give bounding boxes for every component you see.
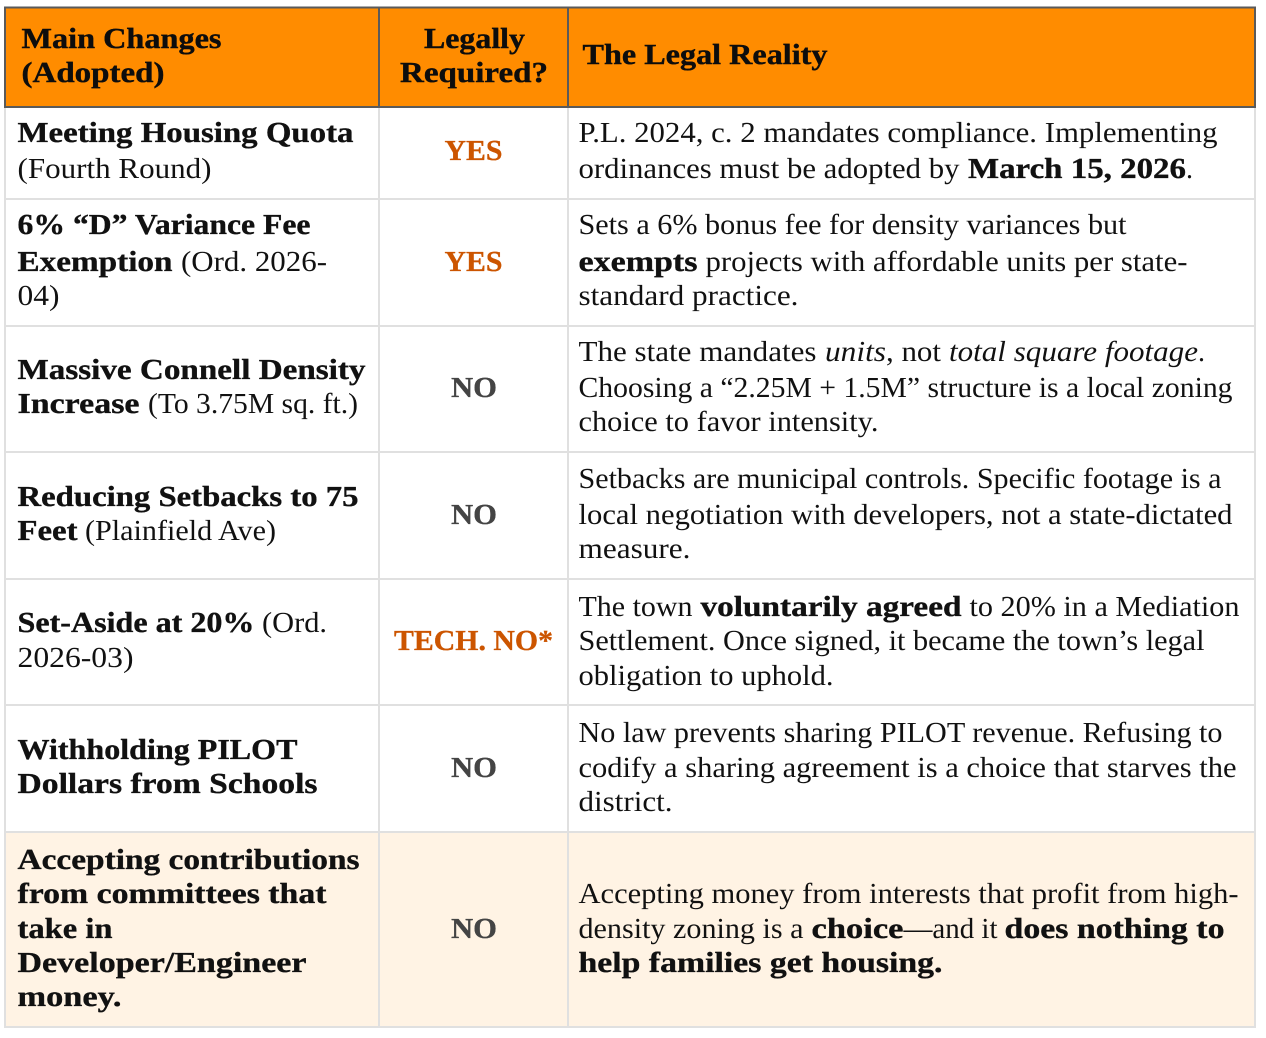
reality: setbacks: local negotiation with developers, not a state-dictated (578, 499, 1233, 531)
change: reducing setbacks (18, 481, 358, 547)
change: set-aside (18, 607, 327, 674)
row: connell density (18, 336, 1232, 438)
reality: connell density (578, 336, 1232, 438)
reality: contributions: —and it (903, 913, 998, 945)
change: accepting contributions: Developer/Engineer (18, 947, 307, 979)
reality: contributions: density zoning is a (578, 913, 804, 945)
change: set-aside: (Ord. (262, 607, 327, 639)
change: withholding pilot: Withholding PILOT (18, 734, 298, 766)
row: variance fee exemption (18, 209, 1188, 312)
reality: housing quota: . (1186, 153, 1193, 185)
reality: contributions: choice (812, 913, 904, 945)
reality: pilot: district. (578, 786, 672, 818)
status: no: NO (451, 752, 497, 784)
change: accepting contributions (18, 844, 360, 1013)
row: withholding pilot (18, 717, 1236, 818)
reality: variance fee: standard practice. (578, 280, 798, 312)
reality: housing quota: P.L. 2024, c. 2 mandates compliance. Implementing (578, 117, 1218, 149)
reality: housing quota: March 15, 2026 (968, 153, 1186, 185)
reality: pilot (578, 717, 1236, 818)
change: variance fee exemption (18, 209, 327, 312)
change: meeting housing quota (18, 117, 354, 185)
reality: set-aside: The town (578, 591, 693, 623)
reality: connell density: . (1198, 336, 1205, 368)
change: reducing setbacks: Feet (18, 515, 78, 547)
heading: legally required: Legally (424, 23, 526, 55)
change: variance fee exemption: (Ord. 2026- (181, 246, 327, 278)
reality: connell density: Choosing a “2.25M + 1.5M” structure is a local zoning (578, 372, 1232, 404)
change: variance fee exemption: Exemption (18, 246, 172, 278)
reality: setbacks (578, 463, 1233, 565)
status: yes: YES (444, 135, 502, 167)
change: set-aside: Set-Aside at 20% (18, 607, 254, 639)
heading: main changes: Main Changes (22, 23, 221, 55)
reality: contributions (578, 878, 1238, 979)
change: reducing setbacks: (Plainfield Ave) (85, 515, 276, 547)
reality: contributions: Accepting money from interests that profit from high- (578, 878, 1238, 910)
status: yes: YES (444, 246, 502, 278)
heading: main changes: (Adopted) (22, 57, 164, 89)
reality: connell density: The state mandates (578, 336, 816, 368)
change: connell density: Increase (18, 388, 140, 420)
reality: set-aside: obligation to uphold. (578, 660, 834, 692)
change: meeting housing quota: Meeting Housing Quota (18, 117, 354, 149)
reality: variance fee: exempts (578, 246, 698, 278)
row: meeting housing quota (5, 107, 1255, 199)
reality: set-aside (578, 591, 1240, 692)
reality: variance fee: Sets a 6% bonus fee for density variances but (578, 209, 1126, 241)
heading: legally required (400, 23, 548, 89)
change: variance fee exemption: 6% “D” Variance Fee (18, 209, 311, 241)
reality: set-aside: voluntarily agreed (700, 591, 962, 623)
reality: set-aside: Settlement. Once signed, it became the town’s legal (578, 625, 1204, 657)
change: withholding pilot: Dollars from Schools (18, 768, 318, 800)
status: no: NO (451, 499, 497, 531)
heading: main changes (22, 23, 221, 89)
reality: setbacks: Setbacks are municipal controls. Specific footage is a (578, 463, 1222, 495)
change: connell density: (To 3.75M sq. ft.) (148, 388, 358, 420)
change: accepting contributions: take in (18, 913, 112, 945)
status: technically no: TECH. NO* (394, 625, 553, 657)
reality: connell density: total square footage (949, 336, 1198, 368)
row: set-aside (18, 591, 1240, 692)
change: meeting housing quota: (Fourth Round) (18, 153, 212, 185)
reality: housing quota: ordinances must be adopted by (578, 153, 960, 185)
change: set-aside: 2026-03) (18, 642, 134, 674)
status: no: NO (451, 372, 497, 404)
reality: connell density: units (825, 336, 886, 368)
row: reducing setbacks (18, 463, 1233, 565)
reality: variance fee: projects with affordable units per state- (706, 246, 1188, 278)
change: reducing setbacks: Reducing Setbacks to 75 (18, 481, 358, 513)
change: connell density (18, 354, 366, 420)
reality: pilot: No law prevents sharing PILOT revenue. Refusing to (578, 717, 1222, 749)
reality: contributions: does nothing to (1004, 913, 1224, 945)
reality: set-aside: to 20% in a Mediation (970, 591, 1240, 623)
heading: the legal reality: The Legal Reality (582, 39, 828, 71)
change: variance fee exemption: 04) (18, 280, 60, 312)
change: accepting contributions: Accepting contributions (18, 844, 360, 876)
reality: pilot: codify a sharing agreement is a choice that starves the (578, 752, 1236, 784)
reality: connell density: choice to favor intensity. (578, 406, 878, 438)
reality: variance fee (578, 209, 1188, 312)
header row (5, 8, 1255, 107)
status: no: NO (451, 913, 497, 945)
reality: contributions: help families get housing. (578, 947, 942, 979)
change: accepting contributions: from committees that (18, 878, 327, 910)
change: connell density: Massive Connell Density (18, 354, 366, 386)
row: highlighted contributions (5, 832, 1255, 1027)
change: withholding pilot (18, 734, 318, 800)
reality: housing quota (578, 117, 1218, 185)
heading: legally required: Required? (400, 57, 548, 89)
reality: connell density: , not (886, 336, 941, 368)
change: accepting contributions: money. (18, 981, 122, 1013)
reality: setbacks: measure. (578, 533, 690, 565)
